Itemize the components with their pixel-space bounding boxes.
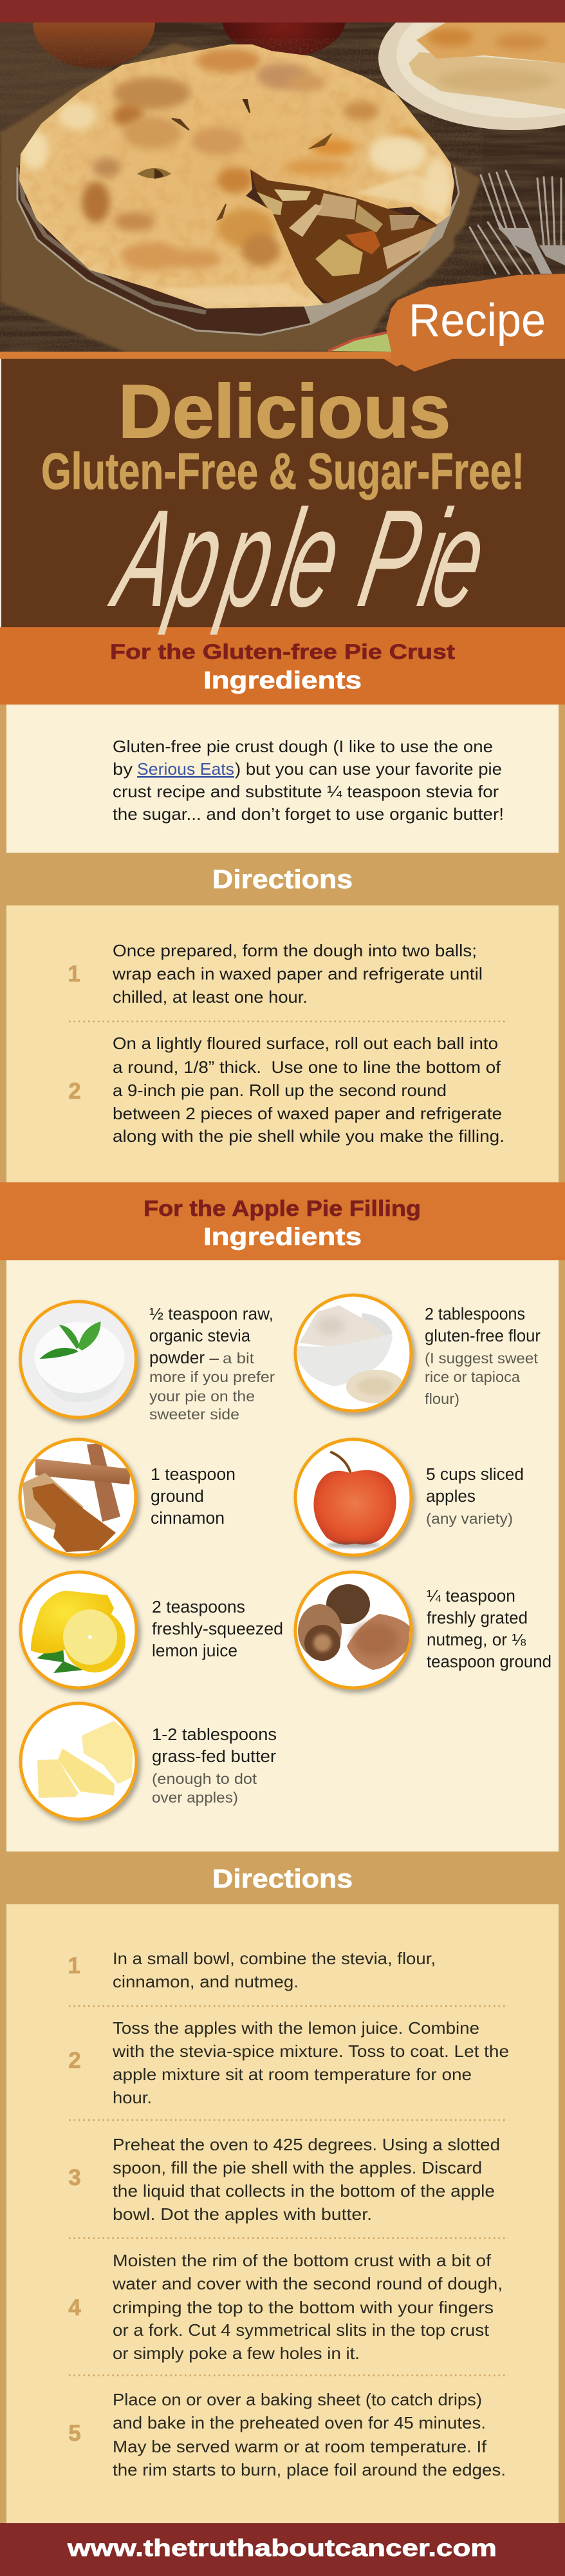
step 2 text [113, 1034, 505, 1146]
text: lemon: lemon juice [152, 1642, 237, 1660]
footer band [0, 2523, 565, 2576]
text: stevia: powder – [149, 1349, 219, 1367]
icon: butter [21, 1703, 136, 1819]
text: apple: (any variety) [426, 1510, 513, 1527]
step 5 text: the rim starts to burn, place foil around the edges. [113, 2460, 506, 2479]
panel: crust directions [6, 905, 559, 1182]
text: butter: grass-fed butter [152, 1748, 277, 1766]
step 2 text: a round, 1/8” thick. Use one to line the bottom of [113, 1057, 501, 1077]
text: apple: apples [426, 1488, 476, 1506]
step number 5: 5 [68, 2421, 81, 2446]
step 2 text: hour. [113, 2088, 152, 2107]
text: stevia: more if you prefer [149, 1368, 275, 1385]
text: nutmeg: ¼ teaspoon [427, 1587, 515, 1605]
title panel [0, 359, 565, 627]
top maroon band [0, 0, 565, 23]
text: butter: over apples) [152, 1789, 238, 1806]
step 1 text: Once prepared, form the dough into two balls; [113, 941, 477, 960]
panel: crust ingredients: by [113, 759, 133, 779]
text: flour: (I suggest sweet [425, 1350, 538, 1367]
step 2 text: On a lightly floured surface, roll out each ball into [113, 1034, 498, 1053]
step 1 text: wrap each in waxed paper and refrigerate until [112, 964, 483, 983]
text: butter: (enough to dot [152, 1770, 257, 1787]
heading: directions: Directions [212, 864, 353, 894]
title: Apple Pie: Apple Pie [101, 481, 497, 636]
text: butter [152, 1726, 277, 1806]
panel: crust ingredients [6, 705, 559, 853]
text: flour: gluten-free flour [425, 1327, 541, 1345]
text: stevia: sweeter side [149, 1406, 239, 1423]
hero photo: apple pie on burlap [0, 0, 565, 352]
Recipe brush badge [384, 274, 565, 372]
step 4 text: Moisten the rim of the bottom crust with a bit of [113, 2251, 492, 2270]
icon: cinnamon [20, 1439, 136, 1555]
text: nutmeg: nutmeg, or ⅛ [427, 1631, 526, 1649]
panel: crust ingredients: crust recipe and substitute ¼ teaspoon stevia for [113, 782, 499, 801]
step number 3: 3 [68, 2165, 81, 2190]
text: lemon: 2 teaspoons [152, 1598, 245, 1616]
step 2 text: apple mixture sit at room temperature for one [113, 2065, 472, 2084]
step 2 text [112, 2018, 509, 2107]
text: lemon: freshly-squeezed [152, 1620, 283, 1638]
text: stevia: your pie on the [149, 1388, 255, 1405]
text: butter: 1-2 tablespoons [152, 1726, 277, 1744]
text: stevia: a bit [223, 1350, 255, 1367]
step 2 text: Toss the apples with the lemon juice. Combine [113, 2018, 479, 2038]
step number 4: 4 [68, 2295, 81, 2320]
step 1 text: cinnamon, and nutmeg. [113, 1972, 299, 1991]
text: flour: 2 tablespoons [425, 1305, 525, 1323]
heading: ingredients: Ingredients [203, 667, 362, 694]
step 3 text: Preheat the oven to 425 degrees. Using a slotted [113, 2135, 500, 2154]
panel: filling ingredients [6, 1260, 559, 1852]
footer website: www.thetruthaboutcancer.com [67, 2535, 497, 2561]
text: cinnamon: 1 teaspoon [151, 1466, 236, 1484]
step 1 text [113, 1949, 436, 1991]
step 3 text: bowl. Dot the apples with butter. [113, 2204, 372, 2224]
step 4 text: or simply poke a few holes in it. [113, 2344, 360, 2363]
text: cinnamon: cinnamon [151, 1510, 225, 1528]
text: lemon [152, 1598, 283, 1660]
text: stevia: organic stevia [149, 1327, 251, 1345]
step 1 text [112, 941, 483, 1007]
text: cinnamon: ground [151, 1488, 204, 1506]
text: stevia [149, 1305, 275, 1423]
step number 2: 2 [68, 1079, 81, 1104]
step 5 text: May be served warm or at room temperature. If [113, 2437, 487, 2456]
panel: crust ingredients: ) but you can use your favorite pie [235, 759, 502, 779]
step 4 text: crimping the top to the bottom with your fingers [113, 2298, 494, 2317]
panel: crust ingredients: Gluten-free pie crust dough (I like to use the one [113, 737, 493, 756]
icon: lemon [21, 1572, 136, 1688]
text: apple [426, 1466, 524, 1527]
section band: apple pie filling [0, 1182, 565, 1260]
panel: crust ingredients: the sugar... and don’t forget to use organic butter! [113, 804, 504, 824]
step number 1: 1 [68, 1953, 80, 1978]
section band: pie crust [0, 627, 565, 705]
step 1 text: In a small bowl, combine the stevia, flour, [113, 1949, 436, 1968]
heading: for the apple pie filling: For the Apple Pie Filling [144, 1197, 421, 1221]
step 4 text [112, 2251, 503, 2363]
orange bar under photo [0, 352, 391, 359]
step 4 text: or a fork. Cut 4 symmetrical slits in the top crust [113, 2320, 490, 2340]
title: Delicious: Delicious [118, 369, 450, 453]
step number 1: 1 [68, 961, 80, 987]
text: nutmeg: teaspoon ground [427, 1653, 551, 1671]
step 1 text: chilled, at least one hour. [113, 987, 308, 1007]
icon: stevia powder [21, 1302, 136, 1417]
step 5 text [113, 2390, 506, 2479]
heading: for the gluten-free pie crust: For the Gluten-free Pie Crust [110, 640, 455, 663]
icon: nutmeg [295, 1572, 411, 1688]
text: cinnamon [151, 1466, 236, 1528]
text: flour: rice or tapioca [425, 1368, 521, 1385]
text: stevia: ½ teaspoon raw, [149, 1305, 273, 1323]
step 2 text: between 2 pieces of waxed paper and refrigerate [113, 1104, 502, 1123]
step 2 text: a 9-inch pie pan. Roll up the second round [113, 1081, 447, 1100]
icon: gluten-free flour [295, 1295, 411, 1411]
text: nutmeg: freshly grated [427, 1609, 528, 1627]
step 5 text: and bake in the preheated oven for 45 minutes. [113, 2413, 486, 2432]
text: flour: flour) [425, 1390, 459, 1407]
text: flour [425, 1305, 541, 1407]
step 2 text: along with the pie shell while you make the filling. [113, 1126, 505, 1146]
step 2 text: with the stevia-spice mixture. Toss to coat. Let the [112, 2041, 509, 2061]
step number 2: 2 [68, 2048, 81, 2073]
heading: ingredients: Ingredients [203, 1224, 362, 1251]
step 3 text [113, 2135, 500, 2224]
step 5 text: Place on or over a baking sheet (to catch drips) [113, 2390, 482, 2409]
step 3 text: the liquid that collects in the bottom of the apple [113, 2181, 495, 2201]
step 4 text: water and cover with the second round of dough, [112, 2274, 503, 2293]
text: nutmeg [427, 1587, 551, 1671]
panel: filling directions [6, 1904, 559, 2523]
Recipe label: Recipe [409, 295, 546, 346]
heading: directions: Directions [212, 1864, 353, 1893]
link: Serious Eats: Serious Eats [137, 759, 234, 779]
text: apple: 5 cups sliced [426, 1466, 524, 1484]
icon: apple [295, 1439, 411, 1555]
step 3 text: spoon, fill the pie shell with the apples. Discard [113, 2158, 482, 2177]
